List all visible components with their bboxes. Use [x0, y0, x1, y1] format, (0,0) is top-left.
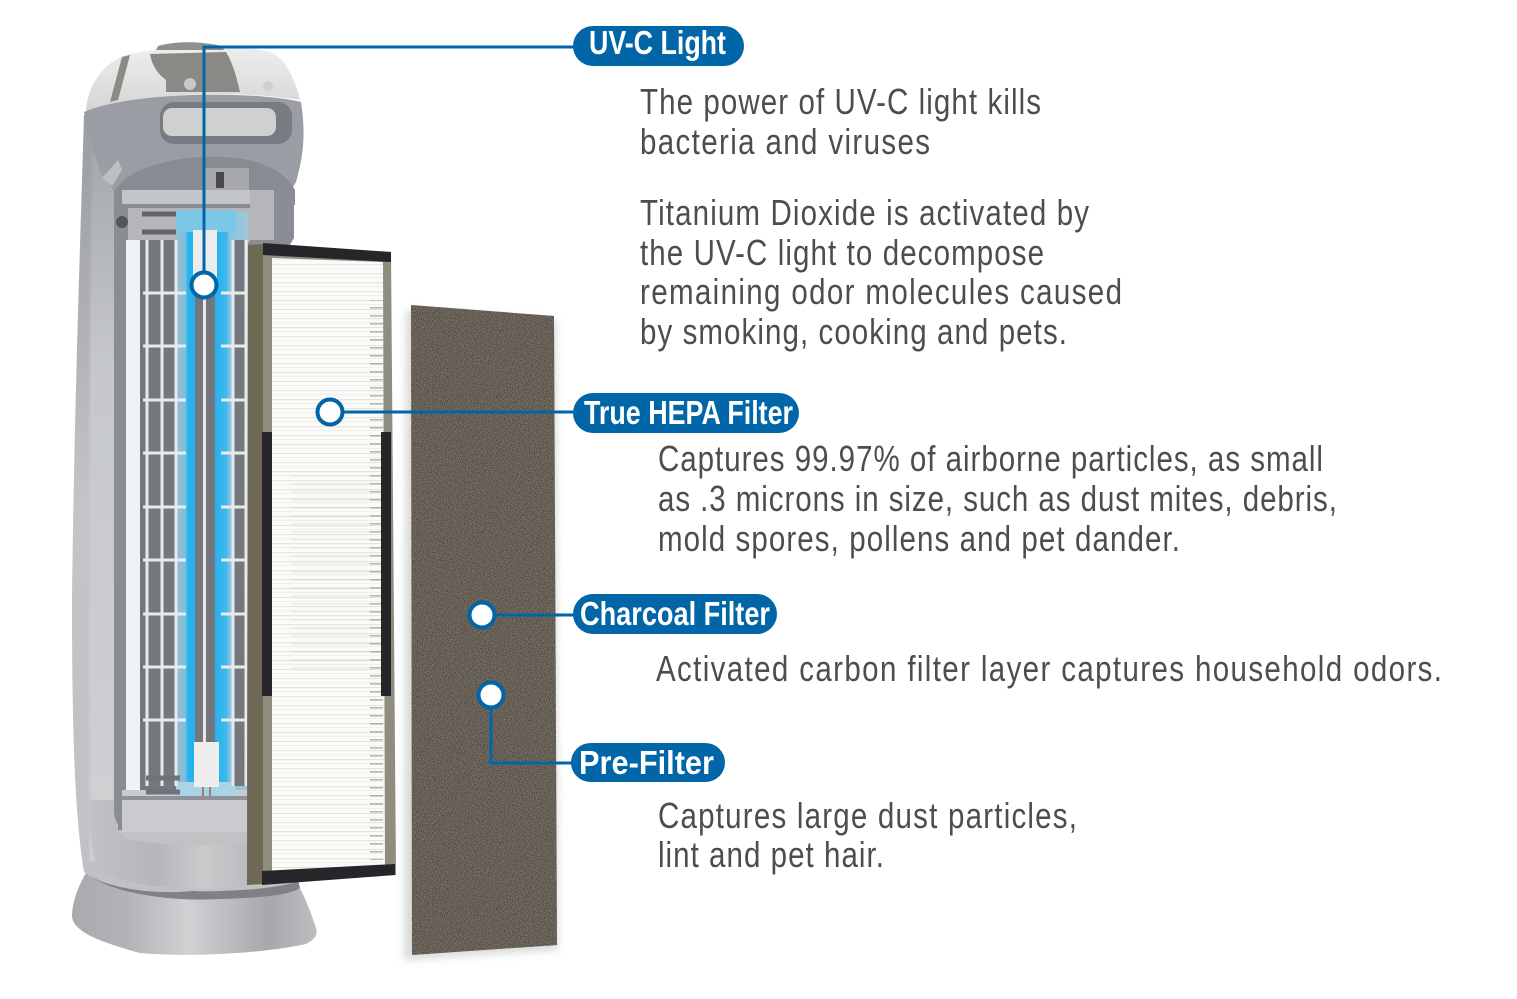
text: charcoal description: Activated carbon filter layer captures household odors. — [656, 648, 1442, 689]
icon: inner chamber with grille — [114, 190, 294, 832]
UV glow bands — [176, 212, 195, 797]
text: HEPA description — [658, 438, 1337, 559]
text: titanium dioxide description: remaining odor molecules caused — [640, 271, 1122, 312]
pleated media — [272, 258, 385, 872]
text: pre-filter description: lint and pet hair. — [658, 834, 884, 875]
icon: purifier base — [72, 872, 317, 955]
heading pill: Pre-Filter: Pre-Filter — [579, 744, 714, 781]
text: pre-filter description: Captures large dust particles, — [658, 795, 1077, 836]
heading pill: UV-C Light: UV-C Light — [589, 24, 726, 61]
text: UV-C description — [640, 81, 1041, 162]
HEPA filter — [247, 243, 396, 885]
callout lines and markers — [192, 47, 580, 763]
heading pill: True HEPA Filter: True HEPA Filter — [584, 394, 793, 431]
text: UV-C description: bacteria and viruses — [640, 121, 930, 162]
black foam strips — [262, 243, 395, 885]
section: UV-C Light — [573, 24, 1122, 352]
grille bars — [147, 240, 246, 786]
section: Pre-Filter — [571, 743, 1077, 875]
heading pill: Charcoal Filter: Charcoal Filter — [580, 595, 770, 632]
pre-filter marker — [478, 682, 580, 763]
icon: UV-C lamp — [193, 230, 219, 797]
icon: purifier top cap — [86, 42, 300, 114]
text: titanium dioxide description: by smoking, cooking and pets. — [640, 311, 1067, 352]
text: HEPA description: as .3 microns in size, such as dust mites, debris, — [658, 478, 1337, 519]
HEPA marker — [318, 400, 580, 424]
section: Charcoal Filter — [573, 594, 1442, 689]
charcoal marker — [470, 602, 580, 628]
text: UV-C description: The power of UV-C light kills — [640, 81, 1041, 122]
text: titanium dioxide description: the UV-C light to decompose — [640, 232, 1044, 273]
air purifier tower — [72, 42, 317, 955]
section: True HEPA Filter — [573, 393, 1337, 559]
icon: purifier upper housing with handle — [84, 95, 304, 205]
filter frame — [247, 245, 396, 885]
text: titanium dioxide description: Titanium Dioxide is activated by — [640, 192, 1090, 233]
text: pre-filter description — [658, 795, 1077, 875]
text: titanium dioxide description — [640, 192, 1122, 352]
UV-C marker — [192, 47, 580, 298]
text: HEPA description: Captures 99.97% of airborne particles, as small — [658, 438, 1323, 479]
icon: purifier body shell — [72, 115, 296, 892]
charcoal filter panel — [404, 305, 558, 960]
text: HEPA description: mold spores, pollens and pet dander. — [658, 518, 1180, 559]
